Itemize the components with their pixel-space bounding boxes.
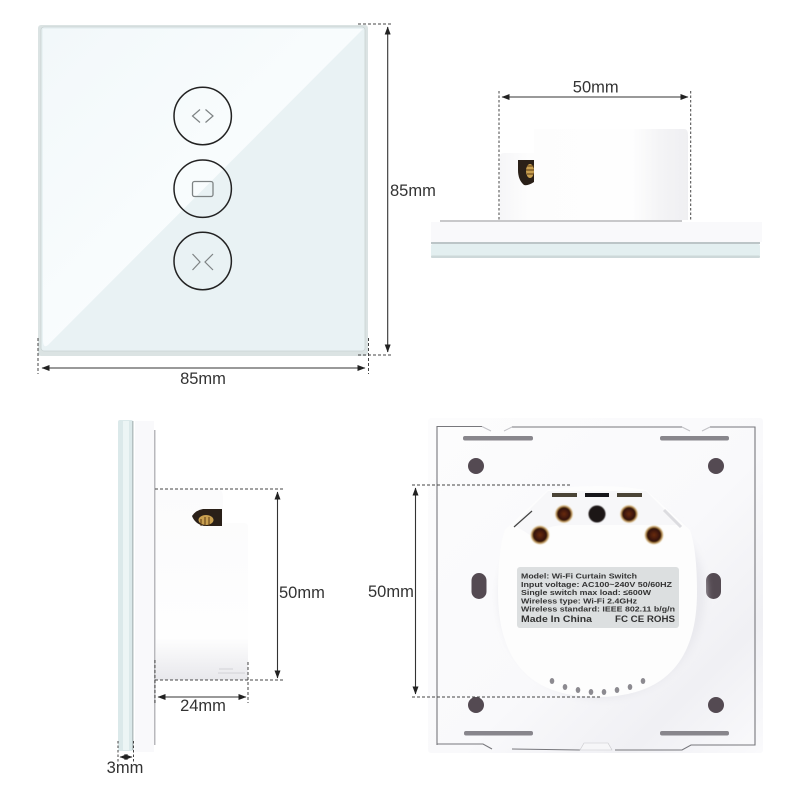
dimension: rear view 50mm: 50mm: [368, 583, 414, 601]
body vent marks: [218, 669, 245, 673]
screw holes: [468, 458, 724, 713]
specification label: FC CE ROHS: [615, 614, 675, 624]
specification label: Wireless type: Wi-Fi 2.4GHz: [521, 596, 637, 606]
specification label: [517, 567, 679, 628]
terminal opening: [518, 160, 534, 185]
button: open curtain: [174, 87, 231, 145]
dimension: front height 85mm: [358, 24, 436, 355]
inner frame line: [437, 426, 755, 750]
mounting body: [500, 129, 688, 220]
specification label: Model: Wi-Fi Curtain Switch: [521, 572, 637, 580]
clip notches: [482, 426, 710, 431]
round module: [498, 486, 697, 697]
button: pause: [174, 160, 231, 217]
dimension: glass thickness 3mm: [107, 741, 143, 777]
glass face: [41, 27, 365, 351]
mounting body: [156, 489, 248, 680]
panel: rear view: [428, 418, 763, 753]
glass layer: [118, 420, 133, 751]
round module shadow: [499, 493, 705, 699]
dimension: top view 50mm: [499, 78, 691, 220]
bottom clip: [580, 743, 612, 750]
terminal opening: [192, 509, 222, 526]
back plate: [440, 220, 682, 222]
dimension: rear view 50mm: [368, 485, 600, 697]
panel: top side view: [431, 129, 762, 258]
glass reflection: [43, 29, 363, 346]
terminal recess: [514, 491, 680, 535]
specification label: Wireless standard: IEEE 802.11 b/g/n: [521, 604, 675, 614]
panel: front view of glass switch: [38, 25, 368, 356]
specification label: Input voltage: AC100~240V 50/60HZ: [521, 580, 672, 589]
panel: left side view: [118, 420, 248, 752]
back plate: [135, 421, 154, 752]
button: close curtain: [174, 232, 231, 290]
terminal slots: [514, 493, 681, 527]
back plate: [428, 418, 763, 753]
dimension: front width 85mm: 85mm: [180, 370, 226, 388]
specification label: Single switch max load: ≤600W: [521, 588, 652, 597]
specification label: Made In China: [521, 614, 593, 624]
dimension: glass thickness 3mm: 3mm: [107, 759, 143, 777]
dimension: depth 24mm: 24mm: [180, 697, 226, 715]
dimension: side view 50mm: [155, 489, 325, 680]
dimension: front width 85mm: [38, 338, 368, 388]
vent holes: [550, 678, 645, 695]
dimension: depth 24mm: [155, 660, 248, 715]
mounting slots: [463, 436, 729, 736]
dimension: front height 85mm: 85mm: [390, 182, 436, 200]
dimension: side view 50mm: 50mm: [279, 584, 325, 602]
glass outer edge: [38, 25, 368, 356]
dimension: top view 50mm: 50mm: [573, 78, 619, 96]
terminal screws: [530, 505, 664, 544]
glass layer: [431, 244, 760, 257]
